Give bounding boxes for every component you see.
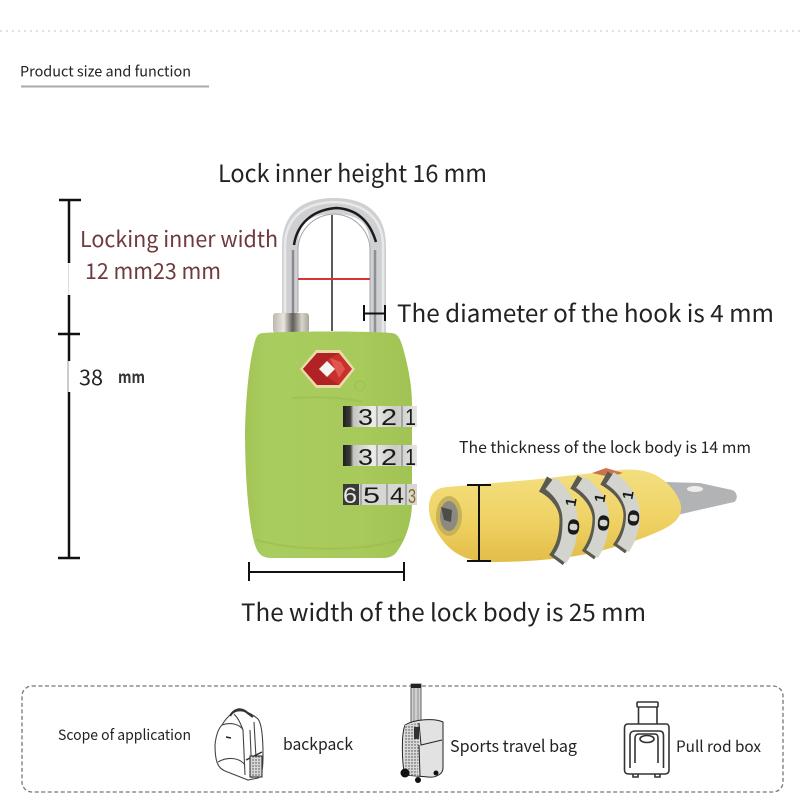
- TSA diamond logo: [300, 350, 355, 388]
- combination dial 1: 2: [381, 404, 397, 430]
- dimension: body width marker: [249, 562, 404, 581]
- dial digits: 1: [619, 490, 638, 501]
- dial digits: 1: [562, 497, 581, 508]
- text: scope of application: Scope of application: [58, 724, 191, 745]
- label: locking inner width: 12 mm23 mm: [85, 254, 221, 286]
- registered mark: [355, 381, 365, 391]
- body contours: [256, 397, 404, 549]
- label: locking inner width: [80, 222, 278, 286]
- lock shackle: [285, 202, 383, 334]
- combination dial 1: [343, 404, 417, 430]
- combination dial 1: 3: [358, 404, 373, 430]
- label: 38 mm: 38: [79, 362, 103, 392]
- dial digits: [562, 490, 644, 537]
- label: sports travel bag: Sports travel bag: [450, 733, 578, 757]
- icon: backpack: [215, 709, 263, 780]
- measure lines on shackle: [331, 215, 333, 331]
- red logo edge: [592, 468, 623, 477]
- label: body width: The width of the lock body is 25 mm: [241, 593, 646, 628]
- label: backpack: backpack: [283, 731, 353, 755]
- thickness marker: [467, 485, 491, 561]
- protruding shackle: [665, 482, 737, 518]
- combination dial 3: 6: [343, 483, 357, 508]
- combination dial 1: 1: [405, 404, 416, 430]
- icon: pull rod box: [624, 702, 669, 777]
- dial digits: 0: [625, 508, 644, 528]
- combination dial 2: 3: [358, 444, 373, 470]
- lock body: [245, 332, 412, 558]
- combination dial 3: [343, 483, 417, 508]
- combination dial 3: 3: [408, 486, 416, 508]
- product photo: green lock: [245, 202, 417, 558]
- shackle collar: [273, 313, 309, 333]
- label: 38 mm: mm: [118, 363, 145, 388]
- combination dial 2: 1: [405, 444, 416, 470]
- combination dial 2: 2: [381, 444, 397, 470]
- combination dial 2: [343, 444, 417, 470]
- keyhole: [436, 496, 462, 536]
- dial rings: [543, 478, 633, 560]
- label: pull rod box: Pull rod box: [676, 735, 761, 757]
- label: hook diameter: The diameter of the hook is 4 mm: [397, 294, 774, 329]
- icon: sports travel bag: [400, 684, 443, 783]
- label: locking inner width: Locking inner width: [80, 222, 278, 254]
- top dotted border: [0, 30, 800, 32]
- label: lock body thickness: The thickness of the lock body is 14 mm: [459, 434, 751, 458]
- yellow body: [429, 470, 681, 562]
- label: 38 mm: [79, 362, 145, 392]
- product photo: yellow lock: [429, 468, 737, 562]
- heading: product size and function: Product size and function: [20, 60, 191, 82]
- dial digits: 0: [565, 517, 584, 537]
- dimension: overall height ruler: [58, 200, 81, 558]
- dial digits: 1: [591, 493, 610, 504]
- label: lock inner height: Lock inner height 16 mm: [218, 154, 487, 189]
- combination dial 3: 4: [390, 483, 404, 508]
- combination dial 3: 5: [363, 483, 380, 508]
- dial digits: 0: [595, 513, 614, 533]
- panel: scope of application: [22, 684, 783, 792]
- dimension: hook diameter marker: [364, 305, 385, 321]
